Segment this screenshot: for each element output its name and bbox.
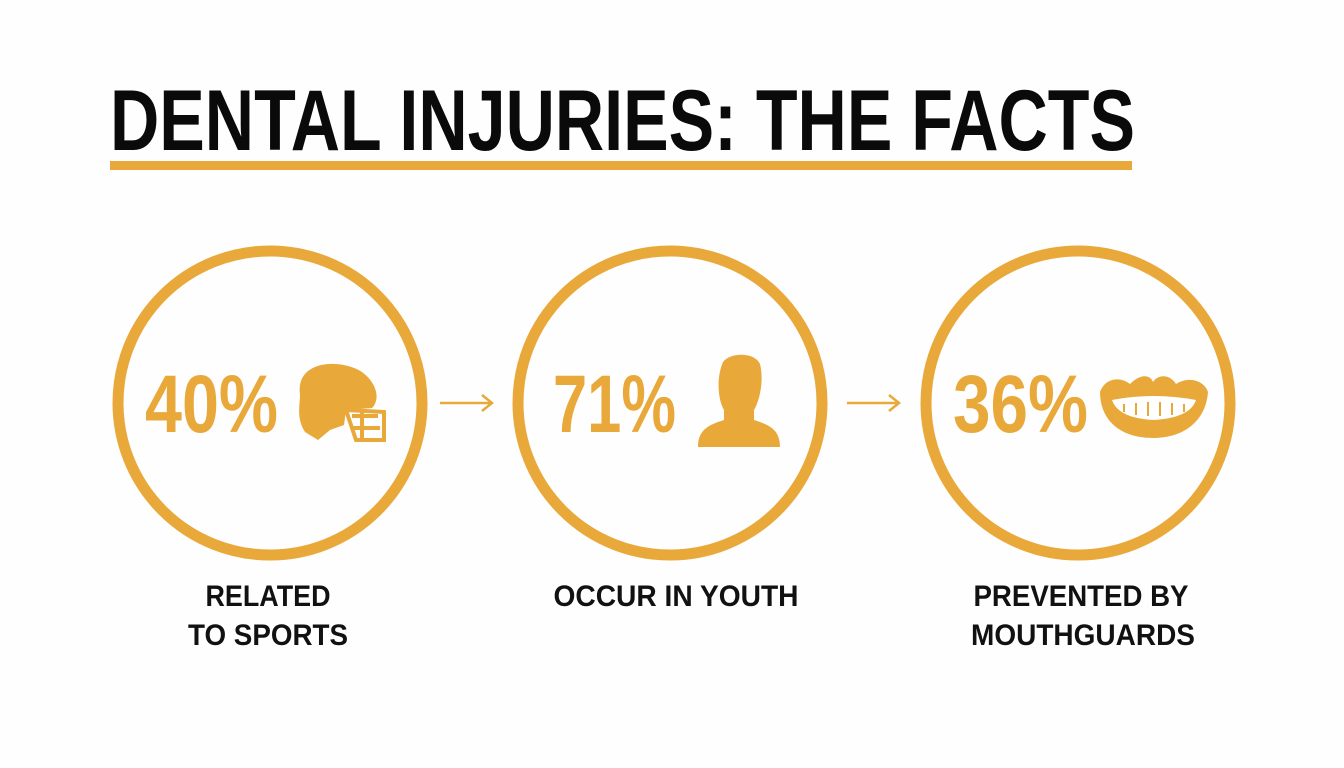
panel: related to sports: 40% xyxy=(145,359,278,450)
icon: person xyxy=(698,355,780,447)
label: related to sports: RELATED xyxy=(206,580,330,613)
arrow 2 xyxy=(847,395,899,411)
panel: related to sports xyxy=(118,251,422,652)
panel: occur in youth: 71% xyxy=(553,359,676,450)
title underline xyxy=(110,161,1132,170)
label: occur in youth: OCCUR IN YOUTH xyxy=(554,580,798,613)
icon: football helmet xyxy=(299,364,384,440)
panel: related to sports: TO SPORTS xyxy=(188,619,348,652)
label: prevented by mouthguards: PREVENTED BY xyxy=(974,580,1188,613)
icon: mouthguard xyxy=(1100,376,1208,438)
arrow 1 xyxy=(440,395,492,411)
panel: prevented by mouthguards: 36% xyxy=(953,359,1088,450)
panel: prevented by mouthguards xyxy=(926,251,1230,652)
panel: prevented by mouthguards: MOUTHGUARDS xyxy=(971,619,1195,652)
panel: occur in youth xyxy=(518,251,822,613)
